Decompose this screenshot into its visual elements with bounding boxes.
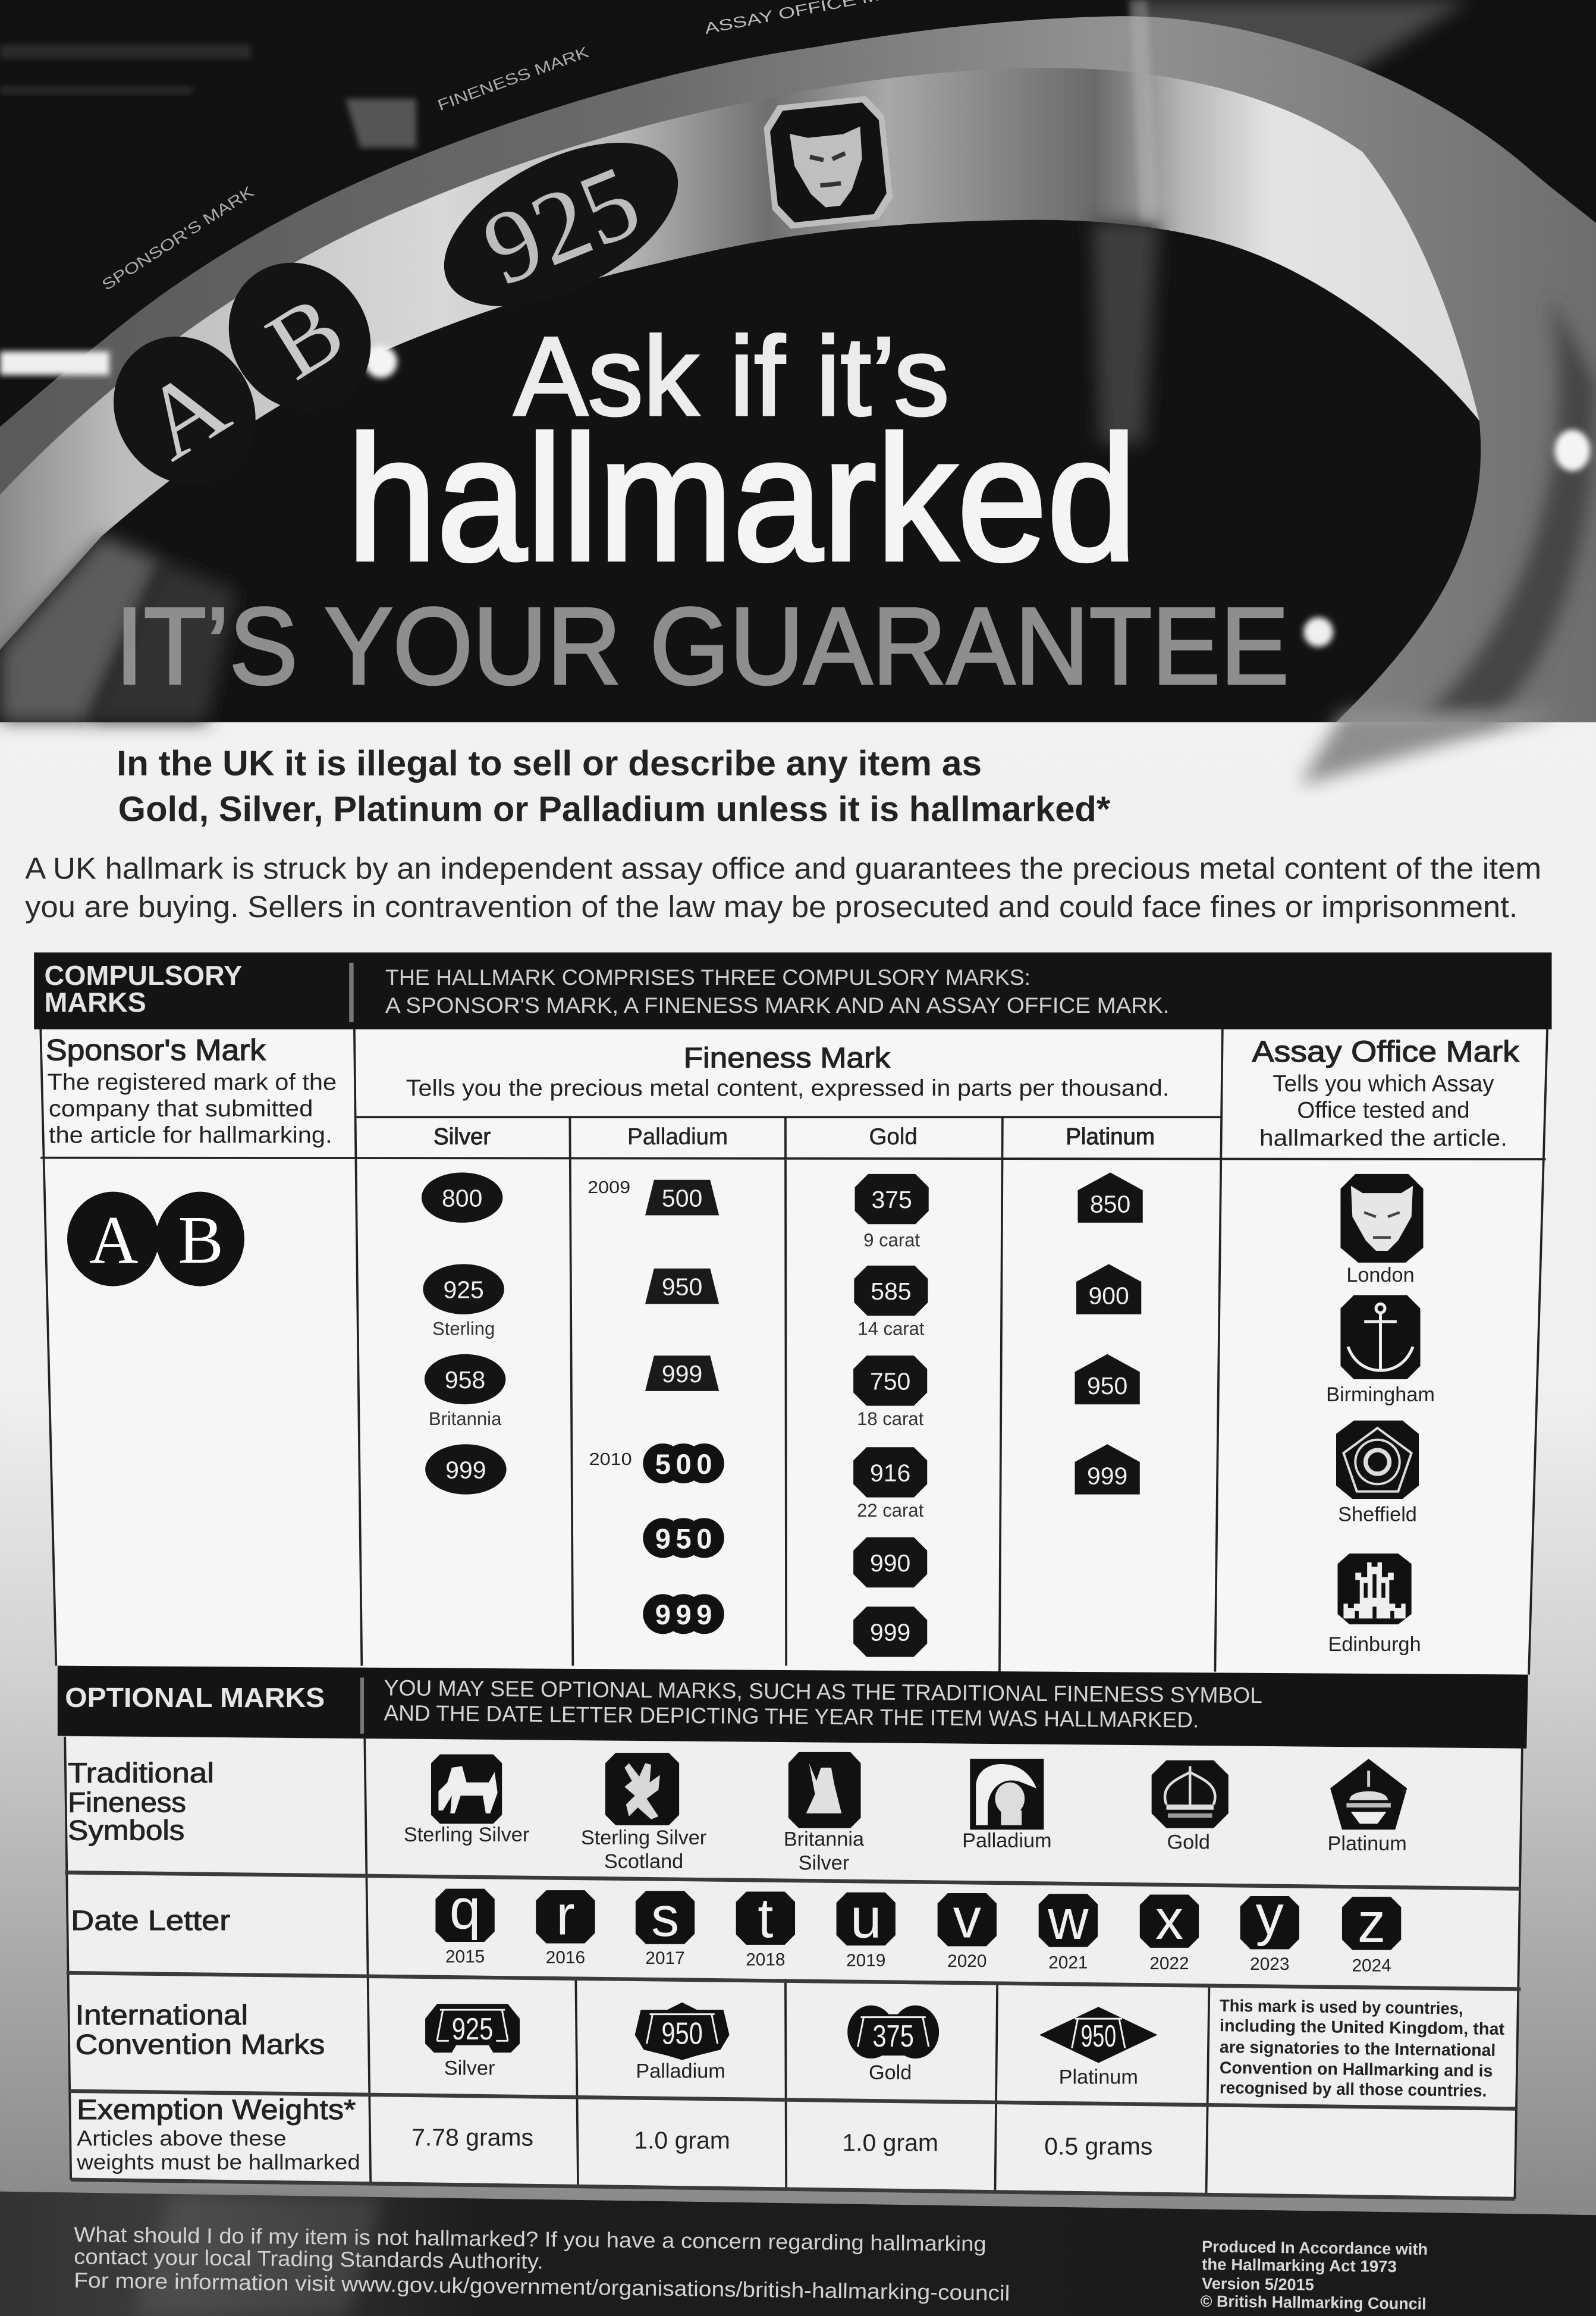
convention mark: platinum: Platinum [1059,2066,1138,2088]
platinum marks: 999 [1087,1462,1127,1489]
gold marks: 18 carat [857,1408,924,1429]
date letters 2015 to 2024: r [556,1884,575,1947]
convention mark: gold: 375 [872,2019,914,2054]
assay: Edinburgh [1328,1554,1421,1656]
fineness mark heading: Tells you the precious metal content, expressed in parts per thousand. [406,1075,1169,1101]
symbol: gold crown [1152,1760,1229,1854]
symbol: britannia [784,1752,865,1874]
gold marks: 585 [871,1278,912,1305]
gold marks: 375 [871,1186,912,1213]
platinum marks: 900 [1088,1282,1129,1309]
intro bold text: In the UK it is illegal to sell or describe any item as [117,743,982,783]
metal column headings: Palladium [627,1124,728,1150]
palladium 2010 marks: 0 [696,1448,712,1480]
footer legal text: Version 5/2015 [1202,2274,1314,2294]
assay: Edinburgh: Edinburgh [1328,1633,1421,1656]
date letters 2015 to 2024: 2021 [1048,1953,1088,1973]
gold marks [853,1174,929,1657]
convention explanatory note: including the United Kingdom, that [1220,2016,1505,2039]
metal column headings: Gold [869,1124,918,1150]
convention explanatory note: This mark is used by countries, [1220,1997,1463,2019]
silver marks: Britannia [429,1408,502,1429]
sponsor mark: AB: A [89,1202,138,1278]
compulsory header bar: MARKS [44,987,146,1018]
silver marks [422,1172,507,1495]
optional header bar: YOU MAY SEE OPTIONAL MARKS, SUCH AS THE TRADITIONAL FINENESS SYMBOL [384,1675,1262,1708]
exemption weight values: 1.0 gram [634,2127,730,2154]
row label: traditional fineness symbols: Fineness [68,1786,186,1818]
date letters 2015 to 2024: 2018 [746,1950,786,1970]
exemption weight values: 0.5 grams [1044,2132,1152,2160]
convention mark: platinum [1039,2007,1158,2088]
metal column headings [433,1124,1155,1150]
sponsor's mark text: company that submitted [49,1096,313,1122]
metal column headings: Platinum [1066,1124,1155,1150]
date letters 2015 to 2024: z [1358,1891,1385,1954]
date letters 2015 to 2024: v [953,1887,981,1950]
exemption weight values [411,2124,1152,2160]
symbol: gold crown: Gold [1167,1831,1210,1854]
sponsor mark: AB [67,1192,244,1286]
palladium 2010 marks: 0 [696,1523,712,1554]
row label: exemption weights: Articles above these [77,2126,287,2151]
gold marks: 14 carat [857,1319,925,1339]
silver marks: 999 [445,1456,486,1483]
compulsory header bar: THE HALLMARK COMPRISES THREE COMPULSORY MARKS: [385,965,1031,990]
palladium 2009 marks [587,1178,719,1391]
row label: exemption weights: Exemption Weights* [77,2094,356,2125]
silver marks: 958 [445,1366,485,1394]
date letters 2015 to 2024: y [1256,1884,1284,1947]
silver marks: Sterling [432,1319,495,1339]
symbol: sterling silver lion: Sterling Silver [404,1824,529,1846]
ring label: sponsor's mark: SPONSOR'S MARK [99,182,257,294]
palladium 2010 marks: 0 [676,1448,692,1480]
symbol: scottish lion: Scotland [604,1850,683,1873]
footer panel [0,2192,1596,2316]
assay: Sheffield: Sheffield [1338,1503,1417,1526]
fineness mark heading [406,1042,1169,1101]
palladium 2010 marks: 9 [696,1599,712,1630]
palladium 2010 marks: 5 [676,1523,692,1554]
hero panel [0,0,1596,722]
footer legal text [1201,2237,1428,2313]
optional header bar: AND THE DATE LETTER DEPICTING THE YEAR THE ITEM WAS HALLMARKED. [384,1700,1199,1732]
headline: ask if it's: Ask if it’s [514,313,949,439]
convention mark: silver: 925 [452,2012,493,2047]
convention mark: palladium [635,2003,730,2082]
gold marks: 750 [870,1367,910,1395]
date letters 2015 to 2024: w [1047,1888,1089,1951]
convention mark: palladium: Palladium [636,2060,725,2082]
inner dark area [0,220,1481,722]
exemption weight values: 7.78 grams [411,2124,533,2151]
convention explanatory note: recognised by all those countries. [1220,2078,1487,2101]
date letters 2015 to 2024: x [1155,1888,1183,1951]
ring mark: AB sponsor: B [250,274,362,400]
date letters 2015 to 2024: 2016 [546,1948,585,1967]
footer legal text: © British Hallmarking Council [1201,2292,1427,2313]
footer help text: What should I do if my item is not hallmarked? If you have a concern regarding hallmarking [74,2222,986,2256]
date letters 2015 to 2024: 2024 [1352,1956,1391,1976]
convention mark: gold: Gold [869,2061,912,2084]
date letters 2015 to 2024: t [758,1887,773,1950]
assay: London [1340,1174,1423,1286]
date letters 2015 to 2024: u [850,1887,881,1950]
intro bold text [117,743,1111,829]
date letters 2015 to 2024: s [651,1885,679,1948]
assay office mark text [1252,1035,1519,1151]
symbol: scottish lion: Sterling Silver [581,1827,706,1849]
assay office mark text: hallmarked the article. [1259,1126,1507,1151]
ring mark: 925 fineness [419,109,703,340]
exemption weight values: 1.0 gram [842,2129,938,2156]
platinum marks: 950 [1087,1372,1127,1399]
date letters 2015 to 2024: q [450,1878,480,1941]
row label: exemption weights: weights must be hallmarked [76,2149,360,2174]
date letters 2015 to 2024: 2015 [445,1947,485,1967]
optional header bar [58,1666,1528,1749]
compulsory header bar [34,952,1552,1030]
row label: exemption weights [76,2094,360,2174]
ring mark: AB sponsor: A [122,345,247,482]
palladium 2010 marks: 5 [655,1448,671,1480]
assay office mark text: Assay Office Mark [1252,1035,1519,1068]
symbol: palladium athena: Palladium [962,1829,1052,1852]
date letters 2015 to 2024: 2017 [645,1948,685,1968]
date letters 2015 to 2024: 2019 [846,1951,885,1970]
footer help text: contact your local Trading Standards Authority. [74,2244,543,2273]
assay office mark text: Tells you which Assay [1273,1071,1494,1097]
intro bold text: Gold, Silver, Platinum or Palladium unless it is hallmarked* [118,789,1111,829]
row label: international convention marks: Convention Marks [76,2029,325,2060]
gold marks: 916 [870,1459,910,1486]
footer help text [74,2222,1010,2305]
convention explanatory note: Convention on Hallmarking and is [1220,2058,1493,2081]
platinum marks [1075,1172,1143,1495]
assay office mark text: Office tested and [1297,1098,1470,1124]
palladium 2009 marks: 999 [662,1360,702,1388]
gold marks: 22 carat [857,1500,924,1521]
ring mark: AB sponsor [85,235,400,513]
sponsor's mark text: The registered mark of the [47,1069,337,1095]
assay: Birmingham: Birmingham [1326,1383,1435,1406]
row label: date letter: Date Letter [71,1904,230,1936]
platinum marks: 850 [1090,1190,1130,1217]
convention mark: platinum: 950 [1080,2019,1116,2054]
metal column headings: Silver [433,1124,491,1150]
palladium 2010 marks: 9 [655,1523,671,1554]
convention explanatory note: are signatories to the International [1220,2038,1496,2060]
ring mark: leopard head [762,95,895,230]
footer legal text: Produced In Accordance with [1202,2237,1428,2258]
symbol: britannia: Silver [799,1851,849,1874]
symbol: sterling silver lion [404,1755,529,1846]
gold marks: 990 [870,1549,910,1577]
assay: Birmingham [1326,1295,1435,1406]
date letters 2015 to 2024: 2023 [1250,1954,1289,1974]
ring label: fineness mark: FINENESS MARK [435,43,592,114]
symbol: palladium athena [962,1759,1052,1852]
intro paragraph: A UK hallmark is struck by an independent assay office and guarantees the precious metal content of the item [25,851,1541,885]
panel: optional marks [58,1666,1528,2199]
silver marks: 800 [442,1185,482,1212]
row label: traditional fineness symbols: Traditional [68,1757,214,1788]
panel: compulsory marks [34,952,1552,1675]
palladium 2009 marks: 500 [662,1185,702,1212]
headline: hallmarked: hallmarked [347,400,1137,598]
palladium 2010 marks: 9 [655,1599,671,1630]
fineness mark heading: Fineness Mark [684,1042,891,1074]
gold marks: 9 carat [863,1230,920,1251]
optional header bar: OPTIONAL MARKS [65,1682,325,1713]
row label: traditional fineness symbols: Symbols [68,1815,184,1846]
palladium 2009 marks: 950 [662,1273,702,1300]
assay: Sheffield [1336,1421,1419,1526]
sponsor's mark text [46,1034,337,1148]
convention mark: silver: Silver [444,2057,495,2079]
ring mark: 925 fineness: 925 [468,143,655,307]
date letters 2015 to 2024: 2022 [1149,1954,1189,1973]
convention mark: silver [425,2004,520,2079]
sponsor's mark text: the article for hallmarking. [49,1123,332,1148]
assay: London: London [1346,1264,1415,1286]
sponsor mark: AB: B [178,1202,224,1278]
date letters 2015 to 2024 [435,1878,1401,1976]
ring rim [0,16,1596,722]
footer legal text: the Hallmarking Act 1973 [1202,2255,1397,2276]
palladium 2010 marks [589,1443,724,1634]
sponsor's mark text: Sponsor's Mark [46,1034,266,1067]
palladium 2010 marks: 2010 [589,1450,632,1469]
convention mark: palladium: 950 [661,2016,703,2051]
palladium 2009 marks: 2009 [587,1178,630,1197]
symbol: platinum orb [1328,1759,1407,1855]
silver marks: 925 [443,1276,484,1303]
gold marks: 999 [870,1618,910,1646]
compulsory header bar: A SPONSOR'S MARK, A FINENESS MARK AND AN ASSAY OFFICE MARK. [385,993,1169,1018]
compulsory header bar: COMPULSORY [44,960,242,991]
ring swoosh over page [1299,712,1565,786]
symbol: scottish lion [581,1753,706,1873]
footer help text: For more information visit www.gov.uk/government/organisations/british-hallmarking-council [74,2268,1010,2305]
intro paragraph: you are buying. Sellers in contravention of the law may be prosecuted and could face fines or imprisonment. [25,890,1518,924]
symbol: britannia: Britannia [784,1828,865,1851]
convention explanatory note [1220,1997,1505,2101]
convention mark: gold [847,2006,939,2084]
intro paragraph [25,851,1541,924]
row label: international convention marks: International [76,1999,248,2031]
ring metal band [0,68,1479,649]
row label: traditional fineness symbols [68,1757,214,1846]
symbol: platinum orb: Platinum [1328,1832,1407,1855]
row label: international convention marks [76,1999,325,2060]
date letters 2015 to 2024: 2020 [947,1951,986,1971]
headline: it's your guarantee: IT’S YOUR GUARANTEE [115,585,1289,707]
palladium 2010 marks: 9 [676,1599,692,1630]
